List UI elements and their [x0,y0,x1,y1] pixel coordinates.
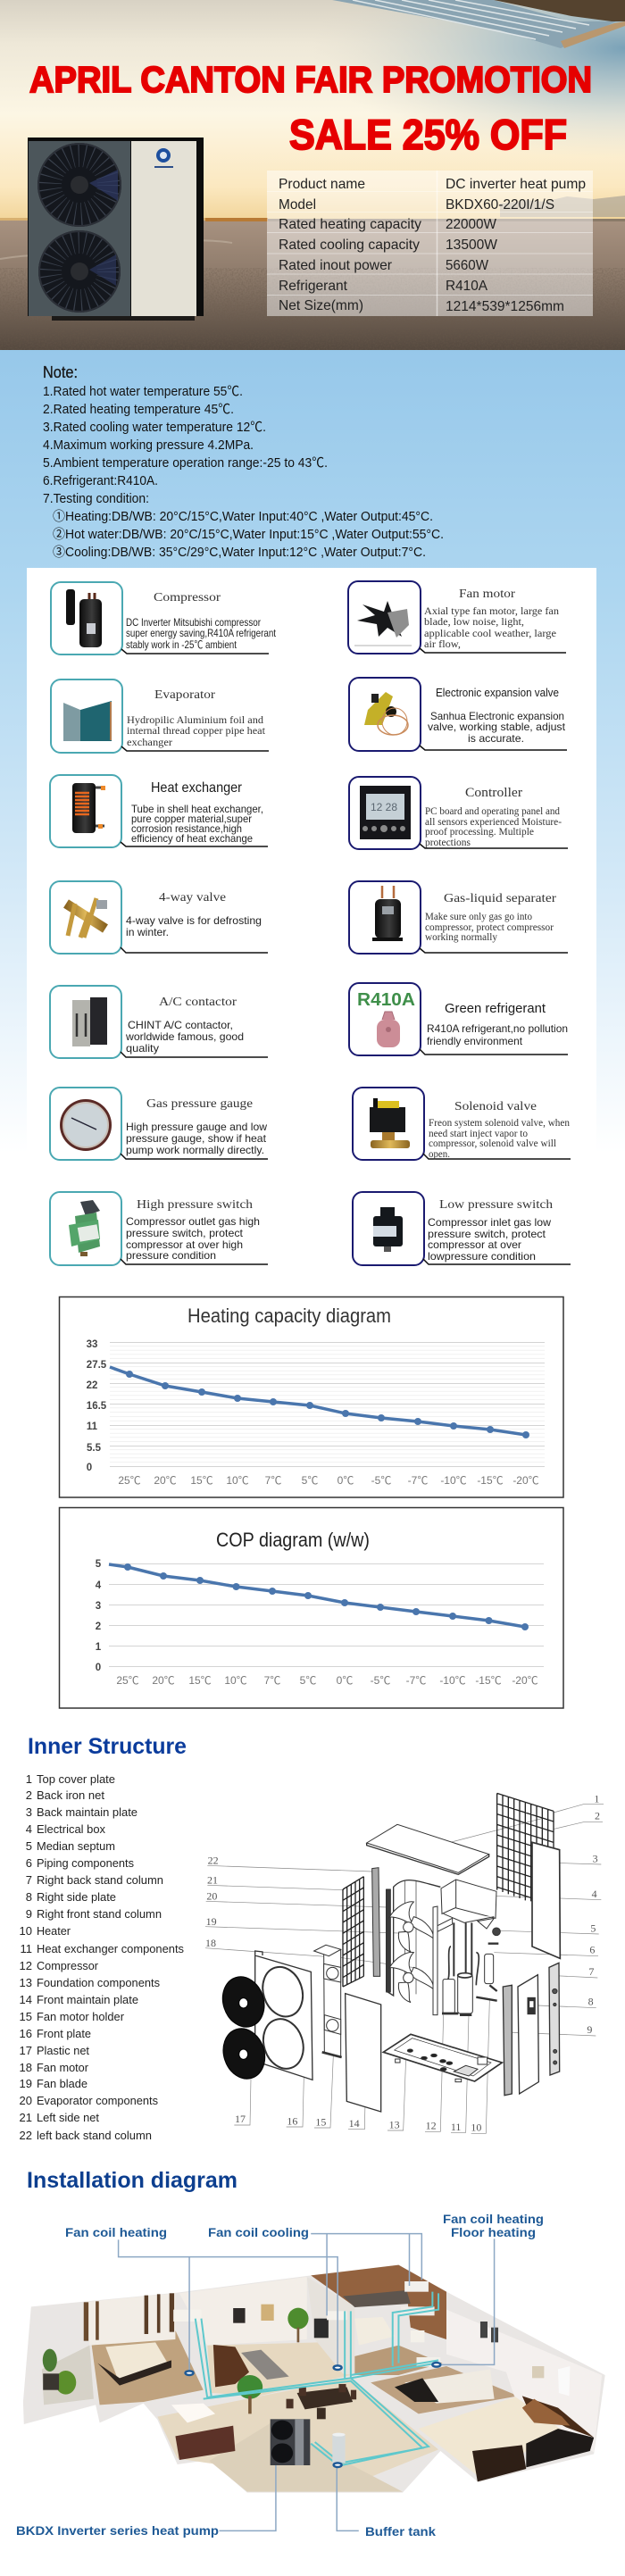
panel: notes: 5.Ambient temperature operation range:-25 to 43℃. [43,455,328,471]
chart: heating capacity diagram: -5℃ [371,1474,391,1487]
part numbers: 21 [207,1874,218,1887]
panel: notes: 7.Testing condition: [43,491,149,506]
parts list [20,1772,184,2142]
card: controller: Controller [465,786,522,800]
spec table: 22000W [446,217,497,232]
card: heat exchanger: corrosion resistance,high [131,822,242,835]
spec table: Rated inout power [279,258,393,273]
card: gas pressure gauge [50,1088,268,1160]
card: compressor: Compressor [154,591,221,604]
chart: heating capacity diagram: 16.5 [87,1401,107,1412]
card: evaporator [51,679,269,753]
card: high pressure switch: High pressure switch [137,1198,253,1212]
chart: heating capacity diagram: 5.5 [87,1443,102,1454]
chart: COP diagram: 0℃ [337,1674,353,1687]
chart title: COP diagram (w/w) [216,1529,370,1551]
card: fan motor: Axial type fan motor, large fan [424,606,559,617]
right front stand column [503,1985,512,2096]
card: controller: PC board and operating panel and [425,806,560,817]
floors [42,2330,570,2492]
card: solenoid valve: need start inject vapor to [429,1129,528,1139]
chart: COP diagram: 10℃ [224,1674,247,1687]
parts list: Front maintain plate [37,1993,138,2006]
card: solenoid valve [353,1088,571,1160]
card: low pressure switch [353,1192,571,1265]
card: evaporator: Hydropilic Aluminium foil and [127,715,263,726]
card: green refrigerant: friendly environment [427,1035,523,1047]
parts list: Top cover plate [37,1772,115,1786]
parts list: 4 [26,1822,32,1836]
part numbers: 7 [588,1965,594,1978]
chart: heating capacity diagram: 5℃ [302,1474,318,1487]
part numbers: 5 [590,1922,596,1934]
parts list: 3 [26,1805,32,1819]
parts list: 20 [20,2094,32,2107]
card: solenoid valve: Solenoid valve [454,1100,537,1113]
card: solenoid valve: compressor, solenoid valve will [429,1138,556,1149]
chart: COP diagram: -10℃ [439,1674,466,1687]
parts list: 14 [20,1993,32,2006]
chart: COP diagram: 5 [96,1559,102,1570]
card: compressor: super energy saving,R410A refrigerant [126,627,277,639]
part numbers: 9 [587,2023,592,2036]
leader lines [205,1805,604,2133]
parts list: Right side plate [37,1890,116,1904]
part numbers: 17 [235,2113,246,2125]
spec table: R410A [446,279,488,294]
parts list: Heater [37,1924,71,1938]
chart: heating capacity diagram: -15℃ [477,1474,504,1487]
card: A/C contactor: worldwide famous, good [125,1030,244,1043]
parts list: 6 [26,1856,32,1870]
electrical box [441,1880,496,1929]
front maintain plate [346,1994,381,2112]
label: buffer tank: Buffer tank [365,2524,436,2538]
card: controller: protections [425,838,471,848]
spec table: Rated heating capacity [279,217,421,232]
parts list: 5 [26,1839,32,1853]
fan motor holder [314,1945,342,2057]
parts list: 7 [26,1873,32,1887]
part numbers: 3 [593,1852,598,1864]
card: gas pressure gauge: pump work normally directly. [126,1144,264,1156]
card: A/C contactor: CHINT A/C contactor, [128,1019,233,1031]
chart: heating capacity diagram: 20℃ [154,1474,177,1487]
part numbers: 18 [205,1937,216,1949]
parts list: 18 [20,2061,32,2074]
card: electronic expansion valve [349,678,567,751]
chart: heating capacity diagram: 7℃ [265,1474,281,1487]
exploded diagram [205,1793,604,2134]
card: high pressure switch: pressure switch, protect [126,1227,244,1239]
title: APRIL CANTON FAIR PROMOTION [29,59,592,100]
part numbers: 1 [594,1793,599,1805]
chart: COP diagram: -15℃ [475,1674,502,1687]
card: A/C contactor [50,986,268,1058]
part numbers: 16 [287,2114,297,2127]
parts list: Compressor [37,1959,99,1972]
chart: heating capacity diagram [59,1296,563,1497]
parts list: Piping components [37,1856,134,1870]
card: low pressure switch: pressure switch, protect [428,1228,546,1240]
panel: notes: ③Cooling:DB/WB: 35°C/29°C,Water Input:12°C ,Water Output:7°C. [53,545,426,560]
evaporator [387,1880,440,1996]
spec table: 13500W [446,238,498,253]
chart: COP diagram: -20℃ [512,1674,538,1687]
card: 4-way valve: 4-way valve [159,891,226,905]
part numbers: 6 [589,1944,595,1956]
panel: notes: 1.Rated hot water temperature 55℃. [43,384,243,399]
heading: inner structure: Inner Structure [28,1734,187,1759]
label: fan coil heating floor heating [443,2212,544,2239]
card: controller: proof processing. Multiple [425,827,534,838]
card: green refrigerant: R410A refrigerant,no pollution [427,1022,568,1035]
parts list: 8 [26,1890,32,1904]
chart: heating capacity diagram: 15℃ [190,1474,213,1487]
card: green refrigerant [349,983,568,1055]
card: controller [349,777,568,849]
parts list: 12 [20,1959,32,1972]
chart: heating capacity diagram: 0℃ [338,1474,354,1487]
card: heat exchanger: pure copper material,super [131,813,252,825]
buffer tank icon [332,2433,346,2463]
median septum [433,1906,453,2015]
card: solenoid valve: open. [429,1149,450,1160]
spec table: BKDX60-220I/1/S [446,197,554,213]
top cover plate [367,1824,489,1874]
part numbers: 11 [451,2121,461,2133]
spec table: Net Size(mm) [279,298,363,313]
back iron net [497,1793,554,1901]
parts list: 19 [20,2077,32,2090]
parts list: Fan motor holder [37,2010,125,2023]
floor plan [23,2234,605,2530]
card: controller: 12 28 [371,801,397,813]
part numbers: 15 [315,2115,326,2128]
card: high pressure switch [50,1192,268,1265]
part numbers: 19 [206,1915,217,1928]
parts list: 11 [20,1942,32,1955]
back maintain plate [532,1842,560,1958]
label: fan coil heating floor heating: Fan coil heating [443,2212,544,2226]
card: low pressure switch: lowpressure condition [428,1250,536,1263]
chart: heating capacity diagram: -20℃ [512,1474,539,1487]
label: heat pump: BKDX Inverter series heat pump [16,2523,219,2538]
card: gas pressure gauge: High pressure gauge and low [126,1121,267,1133]
part numbers: 22 [208,1855,219,1867]
chart: COP diagram: 2 [96,1621,101,1632]
card: electronic expansion valve: is accurate. [468,732,524,745]
chart: COP diagram: -7℃ [406,1674,426,1687]
chart: COP diagram: 25℃ [116,1674,139,1687]
chart: COP diagram: 20℃ [152,1674,175,1687]
parts list: 17 [20,2044,32,2057]
chart: heating capacity diagram: 22 [87,1380,97,1391]
spec table: Refrigerant [279,279,348,294]
panel: hero banner [0,0,625,350]
card: fan motor: Fan motor [459,588,515,601]
card: fan motor: air flow, [424,639,461,650]
parts list: Right back stand column [37,1873,163,1887]
card: gas pressure gauge: pressure gauge, show if heat [126,1132,267,1145]
parts list: Front plate [37,2027,91,2040]
right side plate [518,1975,538,2094]
panel: components [27,568,596,1286]
left back stand column [372,1868,380,1976]
heading: installation diagram: Installation diagram [27,2168,238,2193]
spec table: DC inverter heat pump [446,177,586,192]
card: evaporator: internal thread copper pipe heat [127,726,266,737]
card: evaporator: Evaporator [154,688,215,702]
front plate [255,1951,312,2080]
panel: notes: 6.Refrigerant:R410A. [43,473,158,488]
parts list: Fan motor [37,2061,89,2074]
parts list: Electrical box [37,1822,105,1836]
parts list: Fan blade [37,2077,88,2090]
plastic nets [216,1972,271,2084]
walls [84,2265,602,2453]
card: high pressure switch: pressure condition [126,1249,216,1262]
chart: COP diagram: 15℃ [188,1674,212,1687]
chart title: Heating capacity diagram [188,1305,391,1327]
chart: heating capacity diagram: 33 [87,1339,97,1350]
sale headline: SALE 25% OFF [289,111,567,158]
panel: notes: 4.Maximum working pressure 4.2MPa. [43,438,254,453]
label: fan coil heating left: Fan coil heating [65,2225,167,2239]
card: fan motor: blade, low noise, light, [424,617,524,628]
panel: notes: ①Heating:DB/WB: 20°C/15°C,Water Input:40°C ,Water Output:45°C. [53,509,433,524]
panel: notes [43,363,444,560]
card: low pressure switch: compressor at over [428,1238,521,1251]
chart: heating capacity diagram: 27.5 [87,1360,107,1371]
parts list: Back iron net [37,1788,104,1802]
part numbers: 20 [206,1890,217,1903]
parts list: 22 [20,2129,32,2142]
chart: heating capacity diagram: 10℃ [226,1474,249,1487]
card: compressor: DC Inverter Mitsubishi compressor [126,616,261,629]
part numbers: 10 [471,2122,481,2134]
parts list: left back stand column [37,2129,152,2142]
card: gas pressure gauge: Gas pressure gauge [146,1097,253,1111]
chart: COP diagram: 4 [96,1580,102,1591]
card: solenoid valve: Freon system solenoid valve, when [429,1118,570,1129]
parts list: Foundation components [37,1976,160,1989]
left side net [343,1877,363,1987]
card: gas-liquid separater: working normally [425,932,497,943]
card: electronic expansion valve: Electronic expansion valve [436,686,559,699]
part numbers: 2 [595,1810,600,1822]
page background [0,350,625,1154]
parts list: Back maintain plate [37,1805,138,1819]
part numbers [205,1793,600,2134]
panel: notes: ②Hot water:DB/WB: 20°C/15°C,Water Input:15°C ,Water Output:55°C. [53,527,444,542]
note heading: Note: [43,363,78,381]
building shell [23,2265,605,2493]
chart: COP diagram [59,1507,563,1708]
foundation [383,2034,502,2082]
heat pump icon [271,2419,310,2465]
chart: heating capacity diagram: 0 [87,1463,92,1473]
part numbers: 4 [592,1888,597,1900]
label: fan coil cooling: Fan coil cooling [208,2225,309,2239]
parts list: 2 [26,1788,32,1802]
spec table: 5660W [446,258,489,273]
card: high pressure switch: compressor at over high [126,1238,243,1251]
parts list: Right front stand column [37,1907,162,1921]
card: fan motor: applicable cool weather, large [424,629,556,639]
card: gas-liquid separater: compressor, protect compressor [425,922,554,933]
card: 4-way valve [50,881,268,954]
panel: notes: 2.Rated heating temperature 45℃. [43,402,234,417]
chart: heating capacity diagram: 25℃ [118,1474,141,1487]
parts list: Evaporator components [37,2094,158,2107]
card: gas-liquid separater: Make sure only gas go into [425,912,532,922]
card: 4-way valve: 4-way valve is for defrosting [126,914,262,927]
parts list: 13 [20,1976,32,1989]
parts list: Median septum [37,1839,115,1853]
right back stand column [549,1963,560,2075]
card: electronic expansion valve: valve, working stable, adjust [428,721,566,733]
parts list: 1 [26,1772,32,1786]
heat pump unit [28,138,204,321]
card: gas-liquid separater: Gas-liquid separater [444,892,556,905]
card: heat exchanger: Tube in shell heat exchanger, [131,803,263,815]
chart: COP diagram: 1 [96,1642,102,1653]
card: green refrigerant: Green refrigerant [445,1001,546,1016]
card: compressor: stably work in -25℃ ambient [126,638,238,651]
connection markers [186,2363,440,2467]
card: low pressure switch: Compressor inlet gas low [428,1216,551,1229]
card: A/C contactor: quality [126,1042,159,1055]
part numbers: 8 [588,1996,594,2008]
part numbers: 12 [426,2119,437,2131]
parts list: 9 [26,1907,32,1921]
card: heat exchanger: efficiency of heat exchange [131,832,253,845]
card: heat exchanger [50,775,268,847]
label: fan coil heating floor heating: Floor heating [451,2225,536,2239]
card: fan motor [348,581,566,654]
chart: COP diagram: 7℃ [264,1674,280,1687]
parts list: Heat exchanger components [37,1942,184,1955]
part numbers: 13 [389,2118,400,2130]
chart: COP diagram: 3 [96,1601,101,1612]
parts list: Left side net [37,2111,99,2124]
spec table: Product name [279,177,365,192]
chart: heating capacity diagram: -7℃ [408,1474,428,1487]
card: compressor [51,582,277,654]
furniture [43,2281,594,2481]
piping and compressor [442,1922,500,2015]
card: 4-way valve: in winter. [126,926,169,938]
card: electronic expansion valve: Sanhua Electronic expansion [430,710,564,722]
parts list: 16 [20,2027,32,2040]
spec table: Model [279,197,316,213]
card: A/C contactor: A/C contactor [159,996,237,1009]
card: controller: all sensors experienced Moisture- [425,817,562,828]
leader lines [119,2234,495,2530]
card: low pressure switch: Low pressure switch [439,1198,553,1212]
spec table: Rated cooling capacity [279,238,420,253]
chart: COP diagram: 5℃ [300,1674,316,1687]
part numbers: 14 [349,2117,360,2130]
pipes [196,2292,438,2466]
parts list: 10 [20,1924,32,1938]
panel: notes: 3.Rated cooling water temperature 12℃. [43,420,266,435]
chart: heating capacity diagram: -10℃ [440,1474,467,1487]
spec table: 1214*539*1256mm [446,299,564,314]
parts list: 21 [20,2111,32,2124]
chart: heating capacity diagram: 11 [87,1421,98,1432]
card: evaporator: exchanger [127,738,172,748]
card: high pressure switch: Compressor outlet gas high [126,1215,260,1228]
fan blades [389,1902,433,2003]
parts list: 15 [20,2010,32,2023]
spec table [267,171,593,316]
roof structure [332,0,625,48]
card: green refrigerant: R410A [357,990,415,1010]
card: gas-liquid separater [349,881,568,954]
chart: COP diagram: 0 [96,1663,101,1673]
card: heat exchanger: Heat exchanger [151,780,243,796]
parts list: Plastic net [37,2044,89,2057]
chart: COP diagram: -5℃ [371,1674,390,1687]
